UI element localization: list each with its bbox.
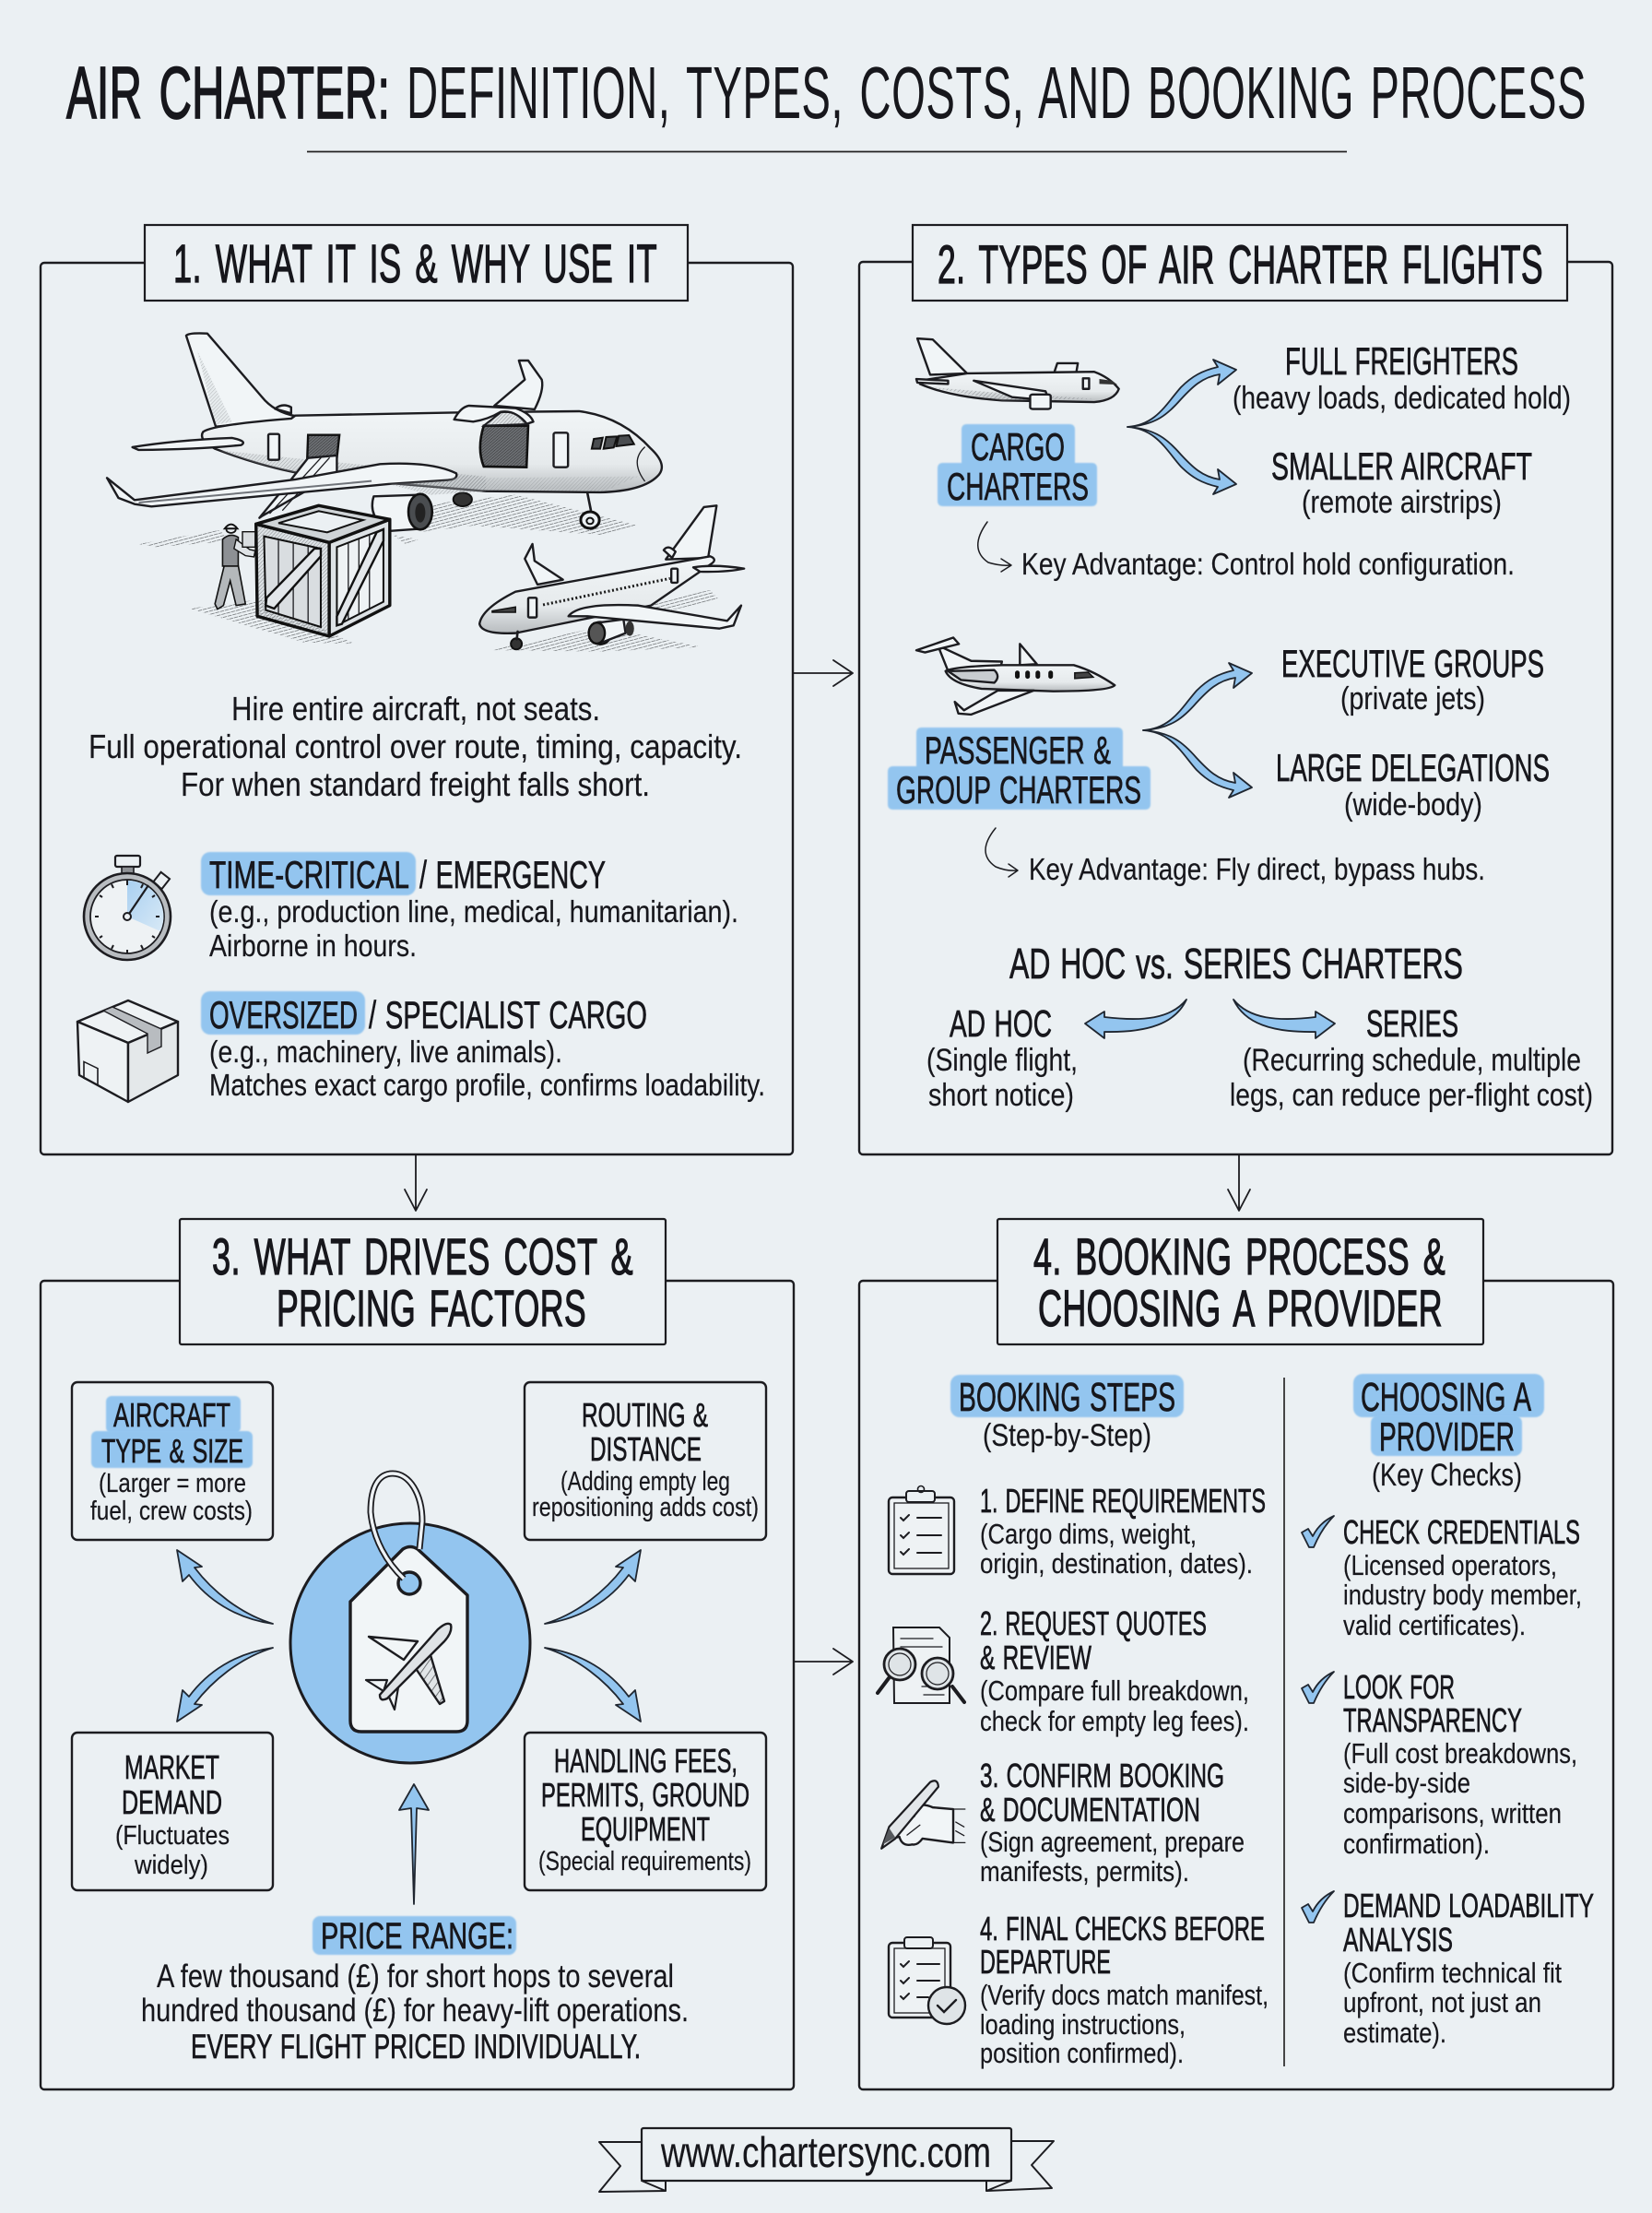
heading: panel 1: 1. WHAT IT IS & WHY USE IT xyxy=(173,234,657,294)
icon: stopwatch xyxy=(84,856,171,960)
text block: price range: EVERY FLIGHT PRICED INDIVIDUALLY. xyxy=(191,2028,641,2065)
text block: step 3: (Sign agreement, prepare xyxy=(980,1826,1245,1858)
factor box: market demand: widely) xyxy=(134,1851,208,1880)
arrow: passenger to executive groups xyxy=(1143,663,1252,730)
heading: panel 4: CHOOSING A PROVIDER xyxy=(1038,1279,1443,1337)
text block: demand loadability analysis: (Confirm technical fit xyxy=(1343,1957,1562,1989)
label: cargo charters: CHARTERS xyxy=(947,465,1089,508)
text block: time-critical: (e.g., production line, medical, humanitarian). xyxy=(209,894,738,929)
icon: check mark 3 xyxy=(1302,1891,1334,1923)
label: cargo charters: CARGO xyxy=(971,425,1065,468)
text block: ad hoc: AD HOC xyxy=(950,1002,1052,1045)
icon: clipboard with verified badge xyxy=(889,1937,965,2024)
text block: definition: For when standard freight falls short. xyxy=(181,765,650,803)
factor box: handling fees: (Special requirements) xyxy=(538,1847,751,1876)
footer banner: website xyxy=(599,2128,1054,2192)
text block: full freighters: FULL FREIGHTERS xyxy=(1285,339,1518,383)
factor box: handling fees: HANDLING FEES, xyxy=(554,1742,738,1780)
landing gear xyxy=(454,492,472,506)
text block: full freighters: (heavy loads, dedicated hold) xyxy=(1233,381,1571,416)
heading: choosing a provider: CHOOSING A xyxy=(1361,1375,1531,1420)
ground shading xyxy=(139,495,719,652)
text block: oversized cargo: / SPECIALIST CARGO xyxy=(369,993,647,1036)
heading: panel 3 xyxy=(180,1219,666,1344)
heading: booking steps: (Step-by-Step) xyxy=(983,1418,1151,1453)
arrow: cargo to full freighters xyxy=(1127,360,1236,427)
text block: step 3: manifests, permits). xyxy=(980,1855,1189,1888)
factor box: market demand: DEMAND xyxy=(122,1783,222,1821)
arrow: to aircraft type xyxy=(177,1550,273,1624)
cargo door opening xyxy=(480,426,528,467)
worker xyxy=(215,525,255,609)
text block: series xyxy=(1230,1002,1593,1113)
airplane on tag xyxy=(366,1624,451,1710)
text block: ad hoc xyxy=(926,1002,1078,1113)
arrow: panel 3 to panel 4 xyxy=(794,1649,853,1675)
heading: choosing a provider: PROVIDER xyxy=(1379,1414,1515,1460)
factor box: aircraft type and size xyxy=(72,1382,273,1540)
text block: full freighters xyxy=(1233,339,1571,416)
wing xyxy=(107,464,456,506)
icon: business jet xyxy=(916,637,1115,715)
text block: demand loadability analysis xyxy=(1343,1887,1594,2049)
text block: definition: Hire entire aircraft, not seats. xyxy=(231,690,600,728)
heading: panel 3: PRICING FACTORS xyxy=(277,1279,586,1337)
text block: look for transparency: LOOK FOR xyxy=(1343,1668,1455,1706)
factor box: handling fees: EQUIPMENT xyxy=(581,1810,710,1848)
text block: oversized cargo: OVERSIZED xyxy=(209,993,358,1036)
arrow: passenger to large delegations xyxy=(1143,730,1252,798)
arrow: cargo to smaller aircraft xyxy=(1127,427,1236,494)
icon: cardboard box xyxy=(77,1000,178,1102)
factor box: routing and distance: (Adding empty leg xyxy=(560,1467,730,1497)
heading: choosing a provider: (Key Checks) xyxy=(1372,1458,1522,1493)
text block: series: (Recurring schedule, multiple xyxy=(1243,1043,1581,1078)
icon: check mark 2 xyxy=(1302,1672,1334,1703)
heading: choosing a provider xyxy=(1353,1374,1544,1493)
text block: look for transparency: side-by-side xyxy=(1343,1767,1470,1799)
text block: check credentials: (Licensed operators, xyxy=(1343,1549,1557,1581)
icon: cargo plane xyxy=(916,338,1119,409)
title: AIR CHARTER: xyxy=(66,52,390,134)
factor box: handling fees: PERMITS, GROUND xyxy=(541,1776,749,1814)
text block: ad hoc: (Single flight, xyxy=(926,1043,1078,1078)
label: passenger and group charters xyxy=(888,728,1150,811)
text block: executive groups xyxy=(1281,642,1544,716)
factor box: aircraft type and size: (Larger = more xyxy=(99,1469,246,1498)
factor box: aircraft type and size: AIRCRAFT xyxy=(113,1396,230,1434)
text block: definition xyxy=(88,690,742,803)
factor box: aircraft type and size: TYPE & SIZE xyxy=(101,1432,243,1470)
arrow: to ad hoc xyxy=(1085,1000,1186,1038)
callout: cargo key advantage: Key Advantage: Control hold configuration. xyxy=(1021,547,1515,581)
arrow: panel 1 to panel 3 xyxy=(405,1154,427,1211)
text block: check credentials: valid certificates). xyxy=(1343,1609,1526,1641)
text block: check credentials: industry body member, xyxy=(1343,1579,1582,1611)
text block: step 3: & DOCUMENTATION xyxy=(980,1791,1200,1828)
factor box: handling fees xyxy=(525,1733,766,1890)
text block: large delegations: (wide-body) xyxy=(1344,787,1482,822)
text block: step 1: 1. DEFINE REQUIREMENTS xyxy=(980,1482,1266,1520)
arrow: panel 2 to panel 4 xyxy=(1228,1154,1250,1211)
heading: panel 2 xyxy=(913,225,1567,301)
text block: time-critical: TIME-CRITICAL xyxy=(209,853,409,896)
factor box: market demand: MARKET xyxy=(124,1748,219,1786)
panel 2: types of air charter flights xyxy=(859,225,1612,1154)
text block: step 4: (Verify docs match manifest, xyxy=(980,1979,1268,2011)
text block: price range xyxy=(141,1916,689,2065)
footer banner: website: www.chartersync.com xyxy=(660,2128,991,2176)
heading: panel 1 xyxy=(145,225,688,301)
text block: price range: hundred thousand (£) for heavy-lift operations. xyxy=(141,1993,689,2029)
heading: panel 3: 3. WHAT DRIVES COST & xyxy=(212,1227,633,1285)
fuselage xyxy=(202,411,662,492)
arrow: to series xyxy=(1233,1000,1335,1038)
text block: step 4 xyxy=(980,1910,1268,2069)
text block: large delegations xyxy=(1276,746,1550,822)
text block: executive groups: (private jets) xyxy=(1340,681,1485,716)
text block: price range: A few thousand (£) for short hops to several xyxy=(157,1959,674,1994)
text block: look for transparency: (Full cost breakdowns, xyxy=(1343,1737,1577,1769)
text block: step 4: DEPARTURE xyxy=(980,1943,1111,1981)
text block: step 2: (Compare full breakdown, xyxy=(980,1675,1249,1707)
text block: step 2: & REVIEW xyxy=(980,1639,1092,1676)
heading: booking steps: BOOKING STEPS xyxy=(959,1375,1175,1420)
text block: oversized cargo: (e.g., machinery, live animals). xyxy=(209,1035,562,1069)
text block: ad hoc: short notice) xyxy=(928,1078,1074,1113)
panel 3: what drives cost and pricing factors xyxy=(41,1219,794,2089)
heading: booking steps xyxy=(950,1375,1184,1453)
icon: document with magnifiers xyxy=(878,1627,964,1703)
aft door and ramp xyxy=(307,435,339,458)
text block: time-critical xyxy=(201,852,738,963)
label: cargo charters xyxy=(938,424,1097,508)
crate xyxy=(256,524,329,636)
text block: smaller aircraft: (remote airstrips) xyxy=(1302,485,1502,520)
text block: oversized cargo xyxy=(201,991,765,1102)
text block: price range: PRICE RANGE: xyxy=(321,1916,513,1957)
panel 1: what it is and why use it xyxy=(41,225,793,1154)
text block: look for transparency: comparisons, written xyxy=(1343,1797,1562,1829)
text block: series: SERIES xyxy=(1366,1002,1458,1045)
text block: step 4: position confirmed). xyxy=(980,2037,1184,2069)
label: passenger and group charters: PASSENGER & xyxy=(925,728,1111,772)
factor box: routing and distance: repositioning adds cost) xyxy=(532,1493,759,1522)
factor box: aircraft type and size: fuel, crew costs) xyxy=(90,1497,253,1526)
callout: cargo key advantage xyxy=(978,522,1515,581)
factor box: market demand xyxy=(72,1733,273,1890)
icon: clipboard checklist xyxy=(889,1486,954,1574)
factor box: routing and distance: ROUTING & xyxy=(582,1396,708,1434)
text block: look for transparency xyxy=(1343,1668,1577,1860)
tail fin xyxy=(186,333,296,427)
arrow: price range to tag xyxy=(399,1784,429,1904)
text block: check credentials xyxy=(1343,1513,1582,1641)
arrow: panel 1 to panel 2 xyxy=(794,660,853,686)
callout: passenger key advantage xyxy=(985,828,1485,886)
text block: step 1: (Cargo dims, weight, xyxy=(980,1518,1197,1550)
icon: check mark 1 xyxy=(1302,1516,1334,1547)
panel 4: booking process and choosing a provider xyxy=(859,1219,1613,2089)
arrow: to routing xyxy=(545,1550,641,1624)
text block: look for transparency: confirmation). xyxy=(1343,1828,1490,1860)
heading: panel 4 xyxy=(997,1219,1483,1344)
text block: time-critical: / EMERGENCY xyxy=(419,853,606,896)
heading: ad hoc vs series: AD HOC vs. SERIES CHARTERS xyxy=(1009,940,1463,988)
horizontal stabiliser xyxy=(133,438,243,450)
text block: step 2: check for empty leg fees). xyxy=(980,1705,1249,1737)
text block: step 1: origin, destination, dates). xyxy=(980,1547,1253,1580)
text block: demand loadability analysis: estimate). xyxy=(1343,2017,1446,2049)
text block: step 2 xyxy=(980,1604,1249,1737)
arrow: to handling fees xyxy=(545,1648,641,1722)
text block: step 1 xyxy=(980,1482,1266,1580)
arrow: to market demand xyxy=(177,1648,273,1722)
callout: passenger key advantage: Key Advantage: Fly direct, bypass hubs. xyxy=(1029,852,1485,886)
small jet xyxy=(525,544,563,585)
doors and cockpit xyxy=(268,434,279,460)
text block: demand loadability analysis: ANALYSIS xyxy=(1343,1921,1453,1959)
text block: oversized cargo: Matches exact cargo profile, confirms loadability. xyxy=(209,1068,765,1102)
text block: step 4: loading instructions, xyxy=(980,2008,1186,2041)
illustration: cargo aircraft, crate, worker and passenger jet xyxy=(107,333,744,652)
engine xyxy=(372,495,427,531)
text block: step 4: 4. FINAL CHECKS BEFORE xyxy=(980,1910,1265,1947)
factor box: routing and distance xyxy=(525,1382,766,1540)
factor box: market demand: (Fluctuates xyxy=(115,1821,230,1851)
icon: price tag with airplane xyxy=(290,1473,530,1763)
far winglet xyxy=(494,361,542,409)
text block: step 2: 2. REQUEST QUOTES xyxy=(980,1604,1207,1642)
door flap xyxy=(454,406,533,424)
text block: time-critical: Airborne in hours. xyxy=(209,929,417,963)
text block: smaller aircraft: SMALLER AIRCRAFT xyxy=(1271,444,1532,488)
text block: smaller aircraft xyxy=(1271,444,1532,520)
icon: hand signing with pen xyxy=(881,1781,965,1849)
text block: look for transparency: TRANSPARENCY xyxy=(1343,1701,1522,1739)
text block: step 3 xyxy=(980,1757,1245,1888)
text block: definition: Full operational control over route, timing, capacity. xyxy=(88,728,742,765)
text block: step 3: 3. CONFIRM BOOKING xyxy=(980,1757,1224,1794)
label: passenger and group charters: GROUP CHARTERS xyxy=(896,768,1141,811)
factor box: routing and distance: DISTANCE xyxy=(590,1430,702,1468)
text block: demand loadability analysis: upfront, not just an xyxy=(1343,1986,1541,2018)
